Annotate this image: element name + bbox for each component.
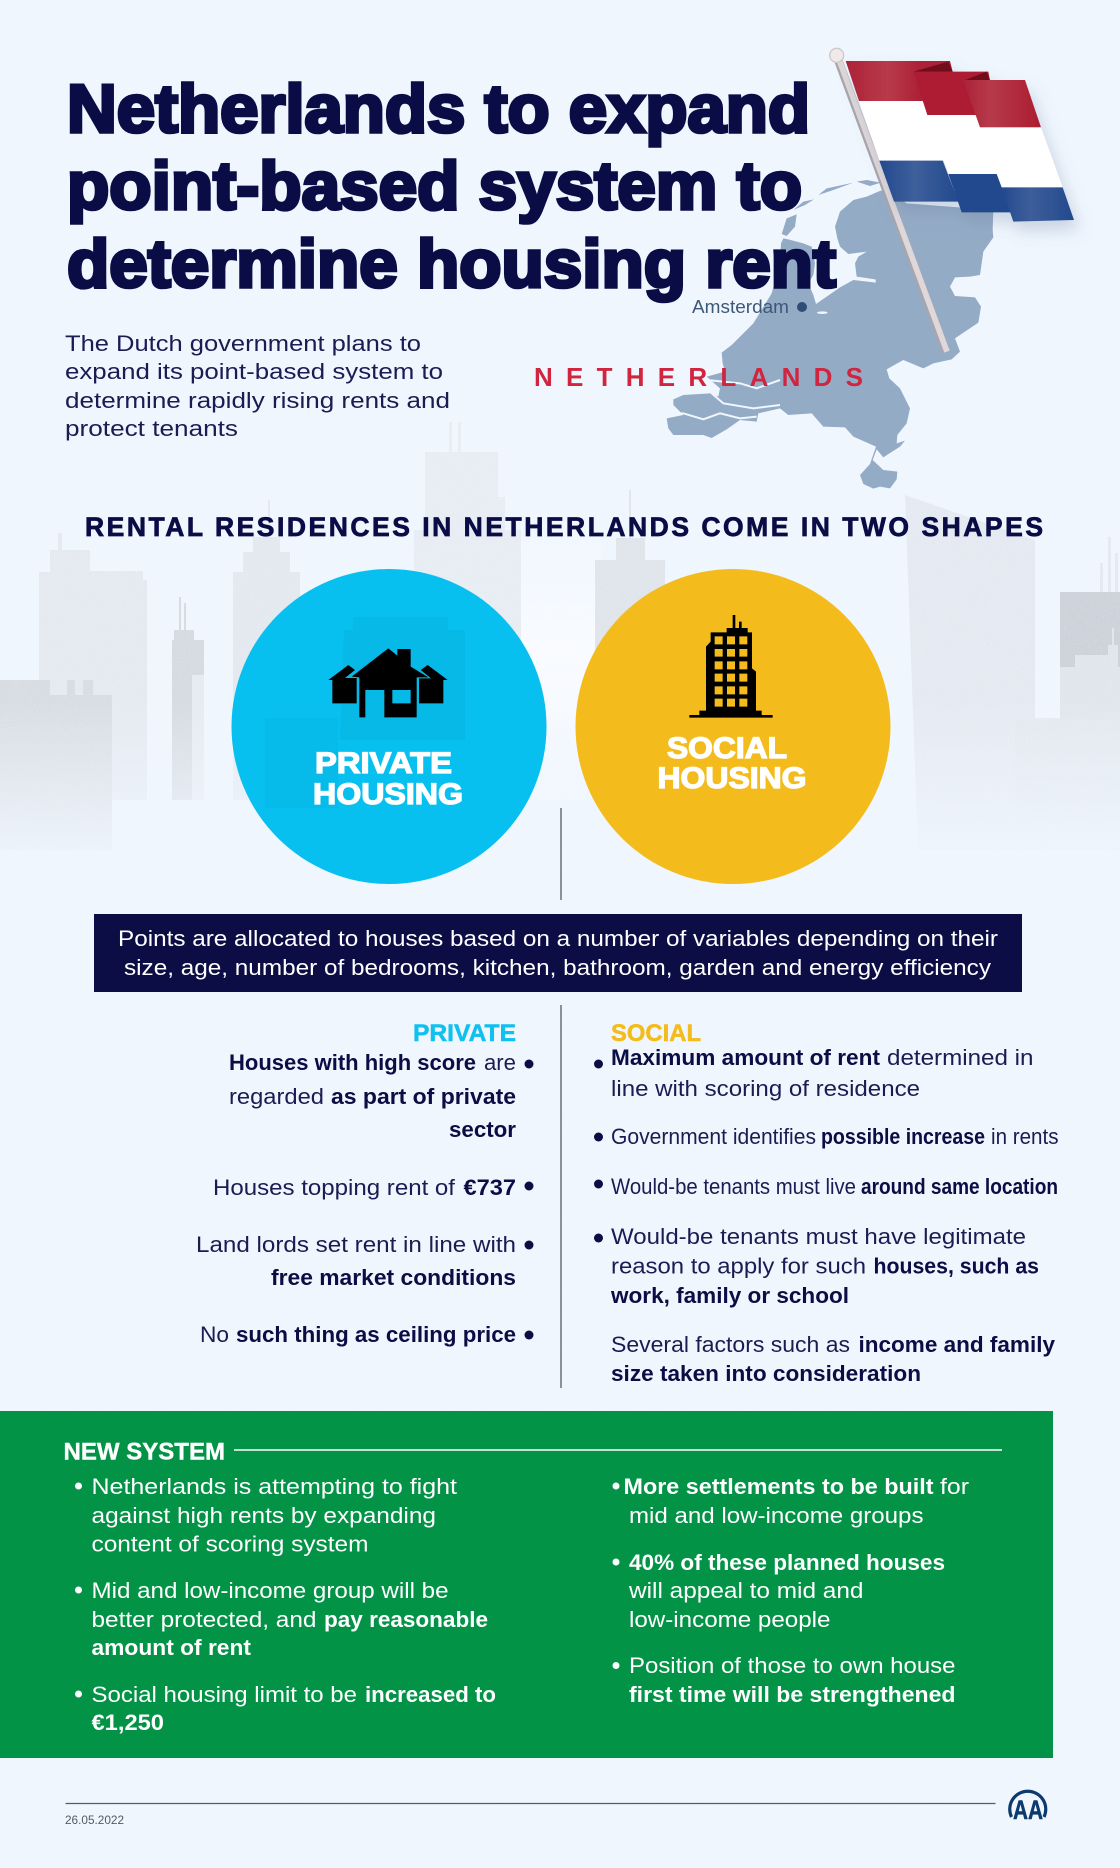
left list: Mid and low-income group will be xyxy=(92,1578,448,1603)
intro paragraph: expand its point-based system to xyxy=(65,359,443,384)
left list: increased to xyxy=(365,1682,496,1707)
connector line above banner xyxy=(560,808,562,900)
right list: will appeal to mid and xyxy=(628,1578,864,1603)
left list: Social housing limit to be xyxy=(92,1682,357,1707)
title: determine housing rent xyxy=(67,226,836,302)
heading: private: PRIVATE xyxy=(413,1020,516,1047)
title: point-based system to xyxy=(67,148,802,224)
label: social housing: HOUSING xyxy=(658,762,806,795)
point: rent increase: in rents xyxy=(991,1124,1058,1149)
icon: AA logo: AA xyxy=(1013,1795,1043,1825)
point: income and family xyxy=(611,1332,1055,1386)
point: same location: around same location xyxy=(861,1174,1058,1199)
panel: social column xyxy=(594,1020,1058,1386)
point: free market: Land lords set rent in line with xyxy=(196,1232,516,1257)
left list: Netherlands is attempting to fight xyxy=(92,1474,458,1499)
right list xyxy=(612,1474,970,1707)
point: free market xyxy=(196,1232,534,1290)
point: legitimate reason: reason to apply for such xyxy=(611,1254,866,1278)
intro paragraph: The Dutch government plans to xyxy=(65,331,421,356)
background skyline xyxy=(0,422,1120,870)
point: high score: are xyxy=(484,1050,516,1075)
left list: content of scoring system xyxy=(92,1532,368,1556)
left list: amount of rent xyxy=(92,1635,252,1660)
Amsterdam map label: Amsterdam xyxy=(692,297,789,317)
point: same location: Would-be tenants must live xyxy=(611,1174,856,1199)
point: free market: free market conditions xyxy=(271,1265,516,1290)
point: rent threshold: Houses topping rent of xyxy=(213,1175,456,1200)
left list: better protected, and xyxy=(92,1607,316,1632)
left list xyxy=(75,1474,496,1735)
point: legitimate reason: houses, such as xyxy=(874,1254,1039,1278)
icon: apartment tower xyxy=(689,615,773,718)
heading: social: SOCIAL xyxy=(611,1020,701,1047)
flag pole xyxy=(830,48,947,352)
icon: houses xyxy=(328,648,448,717)
point: income and family: size taken into consideration xyxy=(611,1361,921,1386)
label: private housing: HOUSING xyxy=(313,778,463,811)
points explanation banner: size, age, number of bedrooms, kitchen, bathroom, garden and energy efficiency xyxy=(124,955,992,980)
point: high score xyxy=(229,1050,534,1142)
point: high score: Houses with high score xyxy=(229,1050,476,1075)
left list: €1,250 xyxy=(92,1710,164,1735)
points explanation banner xyxy=(94,914,1022,992)
panel: private column xyxy=(196,1020,534,1347)
point: maximum rent xyxy=(594,1045,1034,1101)
points explanation banner: Points are allocated to houses based on a number of variables depending on their xyxy=(118,926,999,951)
point: rent increase: Government identifies xyxy=(611,1124,816,1149)
label: private housing xyxy=(313,747,463,811)
label: social housing xyxy=(658,732,806,795)
right list: first time will be strengthened xyxy=(629,1682,956,1707)
column divider xyxy=(560,1005,562,1388)
right list: More settlements to be built xyxy=(624,1474,934,1499)
point: no ceiling: No xyxy=(200,1322,229,1347)
map of the Netherlands xyxy=(667,180,993,489)
right list: mid and low-income groups xyxy=(629,1503,924,1528)
title xyxy=(67,71,836,302)
date: 26.05.2022 xyxy=(65,1813,124,1827)
Dutch flag xyxy=(846,61,1074,222)
left list: pay reasonable xyxy=(324,1607,488,1632)
point: income and family: income and family xyxy=(858,1332,1055,1357)
country name label: NETHERLANDS xyxy=(534,362,863,392)
label: social housing: SOCIAL xyxy=(667,732,787,765)
right list: 40% of these planned houses xyxy=(629,1550,945,1575)
point: legitimate reason: Would-be tenants must have legitimate xyxy=(611,1224,1026,1249)
panel: private housing circle xyxy=(232,569,546,884)
point: income and family: Several factors such as xyxy=(611,1332,850,1357)
point: maximum rent: determined in xyxy=(887,1045,1034,1070)
panel: new system xyxy=(0,1411,1053,1758)
point: maximum rent: Maximum amount of rent xyxy=(611,1045,880,1070)
intro paragraph xyxy=(65,331,450,441)
intro paragraph: protect tenants xyxy=(65,416,238,441)
heading: new system: NEW SYSTEM xyxy=(64,1438,225,1466)
intro paragraph: determine rapidly rising rents and xyxy=(65,388,450,413)
point: no ceiling: such thing as ceiling price xyxy=(236,1322,516,1347)
point: maximum rent: line with scoring of residence xyxy=(611,1076,920,1101)
point: legitimate reason xyxy=(594,1224,1039,1308)
point: high score: regarded xyxy=(229,1084,324,1109)
point: high score: as part of private xyxy=(331,1084,516,1109)
left list: against high rents by expanding xyxy=(92,1503,436,1528)
point: rent increase: possible increase xyxy=(821,1124,985,1149)
point: same location xyxy=(594,1174,1058,1199)
point: legitimate reason: work, family or school xyxy=(610,1283,849,1308)
point: rent threshold: €737 xyxy=(464,1175,516,1200)
footer rule xyxy=(66,1802,996,1804)
panel: social housing circle xyxy=(576,569,890,884)
right list: low-income people xyxy=(629,1607,830,1632)
point: rent increase xyxy=(594,1124,1058,1149)
label: private housing: PRIVATE xyxy=(315,747,452,780)
section heading: RENTAL RESIDENCES IN NETHERLANDS COME IN TWO SHAPES xyxy=(85,512,1043,542)
point: high score: sector xyxy=(449,1117,516,1142)
title: Netherlands to expand xyxy=(67,71,810,147)
right list: for xyxy=(940,1474,970,1499)
right list: Position of those to own house xyxy=(629,1653,956,1678)
